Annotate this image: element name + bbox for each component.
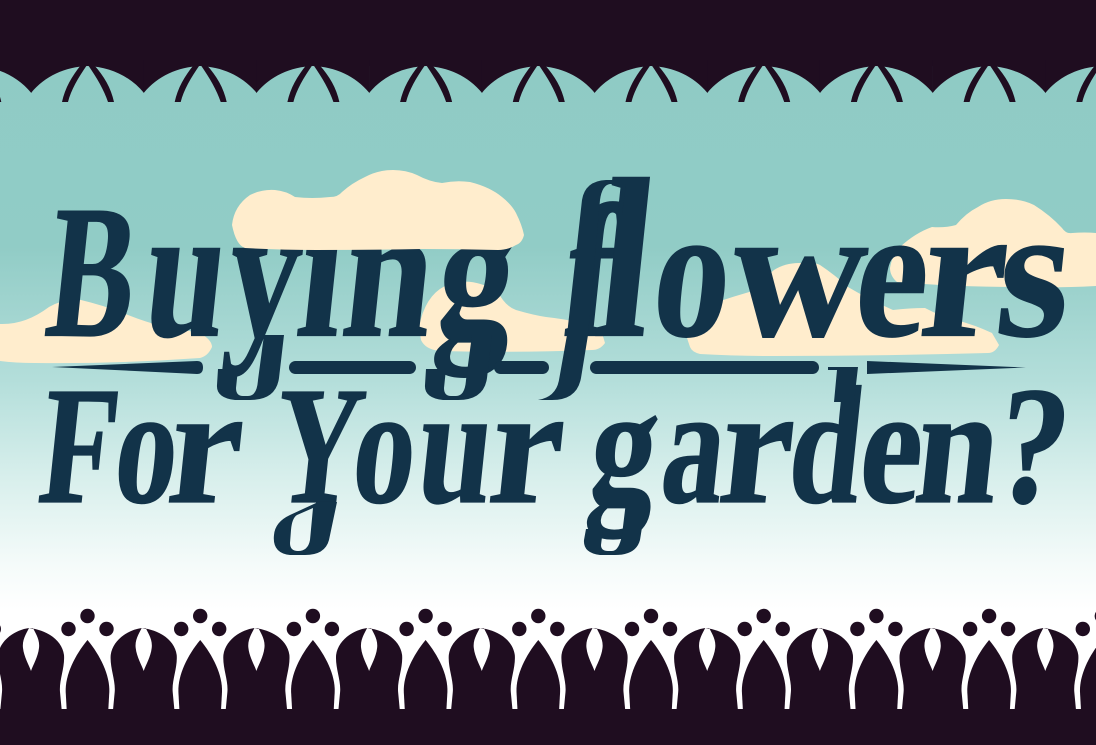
title line 1	[38, 133, 1086, 385]
title line 2: Y	[265, 353, 373, 539]
bar segment 3	[590, 361, 819, 374]
title line 1: o	[645, 167, 743, 377]
title line 2	[32, 353, 1079, 539]
title line 2: ?	[989, 353, 1079, 539]
bar segment 1	[289, 361, 416, 374]
sky background	[0, 60, 1096, 620]
cloud: top centre, over the title	[232, 170, 524, 250]
bottom border: flower pattern	[0, 609, 1096, 745]
title line 2: o	[107, 353, 189, 539]
title line 2: g	[582, 353, 668, 539]
title line 1: i	[290, 167, 356, 377]
title line 1: s	[989, 167, 1083, 377]
title line 2: e	[852, 353, 934, 539]
title: Buying flowers For Your garden?	[32, 133, 1086, 555]
cloud: right lower	[687, 263, 999, 356]
title line 2: d	[781, 353, 873, 539]
title line 2: r	[712, 353, 804, 539]
title line 2: o	[345, 353, 427, 539]
title line 1: y	[219, 167, 313, 377]
cloud: left	[0, 300, 212, 363]
title swashes: long descenders and ascenders	[217, 180, 858, 555]
title line 1: B	[39, 167, 147, 377]
title line 2: F	[32, 353, 128, 539]
top border: dark band	[0, 0, 1096, 66]
title line 1: r	[913, 167, 1019, 377]
title line 1: u	[137, 167, 239, 377]
top border: scallop arches	[0, 60, 1096, 102]
title line 2: u	[410, 353, 504, 539]
divider bar: ornamental rule under line 1	[52, 361, 1026, 374]
title line 1: e	[847, 167, 941, 377]
title line 1: g	[429, 167, 527, 377]
title line 2: a	[654, 353, 736, 539]
cloud: far right	[890, 199, 1096, 287]
right spike	[867, 361, 1026, 374]
title line 1: f	[557, 167, 629, 377]
title line 2: r	[161, 353, 253, 539]
title line 2: n	[908, 353, 1010, 539]
title line 1: n	[335, 167, 446, 377]
left spike	[52, 361, 203, 374]
bar segment 2	[494, 361, 549, 374]
title line 2: r	[482, 353, 574, 539]
title line 1: w	[722, 167, 878, 377]
cloud: centre	[419, 282, 605, 352]
title line 1: l	[587, 133, 667, 385]
